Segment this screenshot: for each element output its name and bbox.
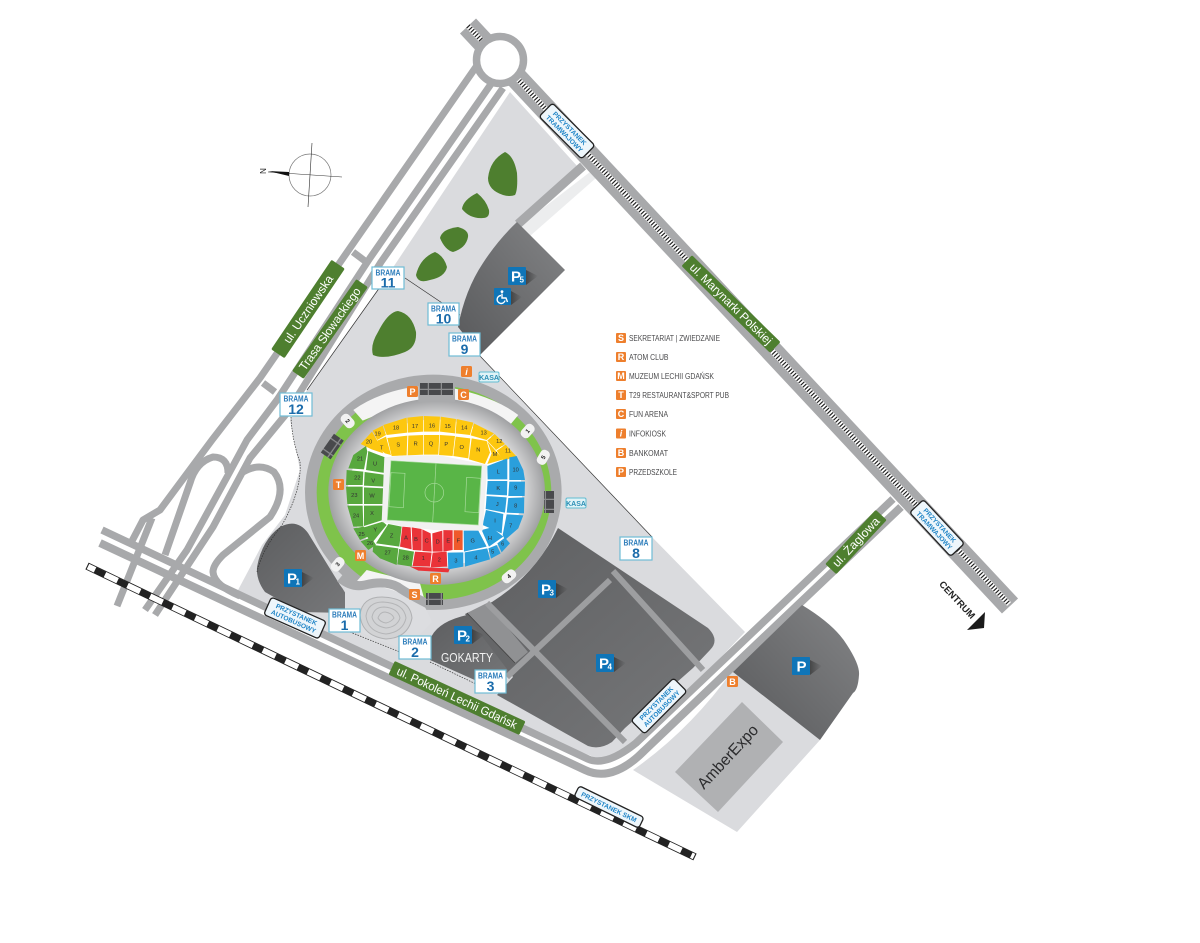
map marker S	[409, 589, 420, 600]
gate 1	[329, 609, 360, 633]
sector labels: S	[396, 443, 400, 449]
sector labels: V	[371, 479, 375, 485]
SKM stop	[574, 786, 644, 828]
legend item R	[616, 352, 668, 362]
map marker R	[430, 573, 441, 584]
SKM stop: PRZYSTANEK SKM	[580, 791, 638, 824]
sector labels: H	[488, 536, 492, 542]
gate 1: BRAMA	[332, 610, 357, 620]
parking sign P3: 3	[550, 588, 554, 598]
parking sign P4: P	[599, 656, 609, 672]
light grey expo area	[633, 670, 820, 832]
sector labels: D	[436, 540, 440, 546]
map marker T	[333, 479, 344, 490]
legend item M: M	[617, 371, 625, 381]
road label: ul. Pokolen Lechii Gdansk: ul. Pokoleń Lechii Gdańsk	[395, 664, 520, 732]
sector labels	[351, 423, 519, 564]
railway: SKM line	[87, 566, 695, 857]
sector labels: 4	[474, 555, 478, 561]
tram stop north: TRAMWAJOWY	[544, 114, 584, 154]
parking sign P: P	[796, 658, 807, 676]
gate 3	[475, 670, 506, 694]
road loops	[165, 457, 280, 596]
numbered ring gates	[329, 412, 551, 585]
road: Trasa Slowackiego	[145, 84, 503, 615]
sector labels: 3	[454, 558, 458, 564]
map marker S: S	[411, 590, 418, 600]
sector labels: B	[414, 537, 418, 543]
legend item C: FUN ARENA	[629, 410, 669, 419]
football pitch	[382, 455, 487, 531]
bus stop east: PRZYSTANEK	[639, 686, 675, 722]
sector labels: 2	[438, 558, 441, 564]
gate 11: BRAMA	[376, 268, 401, 278]
legend item P: PRZEDSZKOLE	[629, 468, 677, 477]
legend item i: i	[620, 429, 623, 439]
stadium outer ring	[305, 375, 562, 610]
sector labels: K	[496, 486, 500, 492]
sector labels: 26	[367, 541, 373, 547]
sector labels: R	[414, 441, 418, 447]
ticket office east	[566, 498, 586, 508]
gate 12: 12	[288, 401, 304, 417]
bus stop west: AUTOBUSOWY	[270, 609, 317, 635]
gate 10: 10	[436, 310, 451, 326]
sector labels: I	[494, 519, 496, 525]
sector labels: 21	[357, 457, 363, 463]
sector labels: 12	[496, 439, 502, 445]
sector labels: U	[373, 462, 377, 468]
sector labels: 5	[491, 549, 494, 555]
gate 8: BRAMA	[624, 538, 649, 548]
parking sign P1: 1	[296, 578, 300, 586]
ticket office east: KASA	[566, 501, 586, 508]
sector labels: G	[470, 538, 475, 544]
sector labels: O	[459, 445, 464, 451]
parking sign P1	[284, 569, 314, 588]
parking sign P4	[596, 654, 626, 672]
gate 11	[372, 267, 404, 290]
green seating sectors	[346, 446, 414, 567]
tram stop south	[910, 500, 964, 556]
gate 9	[449, 333, 480, 357]
tram stop south: PRZYSTANEK	[922, 507, 957, 545]
sector labels: 17	[412, 424, 418, 430]
sector labels: 27	[385, 550, 391, 556]
gate 8	[620, 537, 652, 561]
sector labels: 13	[480, 431, 487, 437]
AmberExpo building	[675, 702, 783, 812]
sector labels: 6	[501, 542, 504, 548]
legend item S: SEKRETARIAT | ZWIEDZANIE	[629, 334, 720, 343]
sector labels: L	[497, 469, 500, 475]
tram stop north	[539, 103, 595, 159]
grey ring under top stairs	[418, 380, 455, 402]
map marker M: M	[357, 551, 364, 561]
parking P1	[257, 524, 348, 613]
stairs	[321, 383, 554, 605]
map marker P	[407, 386, 418, 397]
parking sign P5	[508, 267, 538, 286]
yellow seating sectors	[361, 416, 517, 464]
gate 11: 11	[381, 274, 396, 290]
legend item T: T29 RESTAURANT&SPORT PUB	[629, 391, 729, 400]
gate 2	[399, 636, 431, 660]
legend item B: BANKOMAT	[629, 449, 668, 458]
legend item R: ATOM CLUB	[629, 353, 668, 362]
sector labels: 15	[445, 424, 451, 430]
parking sign P3	[538, 580, 568, 598]
parking sign P5: P	[511, 268, 521, 286]
sector labels: A	[404, 535, 408, 541]
legend item R: R	[618, 352, 625, 362]
sector labels: J	[496, 502, 499, 508]
legend item S: S	[618, 333, 624, 343]
bus stop east	[631, 678, 687, 734]
road: ul. Pokolen Lechii Gdansk and ul. Zaglowa	[100, 499, 901, 774]
sector labels: E	[446, 539, 450, 545]
parking sign P	[792, 657, 822, 676]
sector labels: N	[476, 448, 480, 454]
map marker C	[458, 389, 469, 400]
sector labels: 10	[512, 468, 519, 474]
legend item i	[616, 428, 667, 439]
roundabout	[476, 36, 524, 84]
road label: ul. Uczniowska: ul. Uczniowska	[280, 272, 336, 346]
legend	[616, 333, 729, 477]
map marker B: B	[729, 677, 736, 687]
road label: Trasa Slowackiego: Trasa Słowackiego	[296, 285, 364, 373]
stadium green concourse	[317, 385, 551, 600]
numbered ring gates: 5	[541, 454, 548, 461]
tram stop south: TRAMWAJOWY	[914, 511, 953, 552]
legend item P: P	[618, 467, 624, 477]
sector labels: 24	[353, 513, 359, 519]
bus stop east: AUTOBUSOWY	[643, 689, 682, 729]
gate 9: 9	[461, 341, 469, 357]
parking P5	[458, 222, 565, 355]
map marker R: R	[432, 574, 439, 584]
road label: ul. Marynarki Polskiej: ul. Marynarki Polskiej	[687, 260, 775, 348]
numbered ring gates: 4	[506, 573, 513, 580]
parking sign P2	[454, 626, 484, 644]
numbered ring gates: 2	[344, 418, 351, 425]
map marker C: C	[460, 390, 467, 400]
map marker T: T	[336, 480, 342, 490]
sector labels: 16	[429, 423, 435, 429]
bus stop west	[264, 597, 326, 639]
road label: ul. Zaglowa: ul. Żaglowa	[829, 514, 883, 570]
inner grey ring	[328, 398, 545, 585]
sector labels: Z	[390, 533, 394, 539]
parking sign P4: 4	[608, 662, 612, 672]
sector labels: 7	[509, 524, 512, 530]
gate 10: BRAMA	[431, 304, 456, 314]
seating bowl base	[348, 419, 522, 567]
compass: N	[258, 168, 267, 174]
ticket office north: KASA	[479, 375, 499, 382]
sector labels: 9	[514, 485, 517, 491]
gate 10	[428, 303, 459, 326]
gate 3: 3	[487, 678, 495, 694]
numbered ring gates: 3	[335, 561, 342, 568]
blue seating sectors	[448, 456, 525, 569]
AmberExpo building: AmberExpo	[695, 722, 762, 793]
sector labels: X	[370, 511, 374, 517]
sector labels: 23	[351, 493, 357, 499]
legend item C	[616, 409, 669, 419]
fence lines	[257, 278, 652, 684]
legend item B: B	[618, 448, 625, 458]
compass	[258, 143, 342, 207]
legend item M: MUZEUM LECHII GDAŃSK	[629, 372, 715, 381]
legend item S	[616, 333, 720, 343]
legend item M	[616, 371, 715, 381]
sector labels: 11	[505, 448, 511, 454]
sector labels: 19	[375, 432, 381, 438]
legend item i: INFOKIOSK	[629, 430, 667, 438]
legend item T: T	[618, 390, 624, 400]
light grey site area	[237, 92, 745, 762]
parking P2	[430, 615, 515, 690]
gate 2: BRAMA	[402, 638, 428, 646]
sector labels: F	[457, 538, 461, 544]
sector labels: M	[493, 452, 498, 458]
go-kart track	[340, 578, 432, 650]
road: ul. Marynarki Polskiej with tram track	[468, 26, 1010, 606]
sector labels: 25	[359, 532, 365, 538]
sector labels: 8	[514, 504, 517, 510]
sector labels: W	[369, 494, 375, 500]
service road	[518, 166, 596, 236]
centrum direction arrow: CENTRUM	[936, 579, 977, 622]
parking P3 and P4 block	[465, 528, 715, 747]
sector labels: T	[380, 445, 384, 451]
gate 12	[280, 393, 312, 417]
icon: accessible parking	[494, 288, 522, 305]
tram stop north: PRZYSTANEK	[551, 111, 587, 147]
parking P east	[733, 605, 859, 740]
map marker i: i	[465, 367, 468, 377]
parking sign P5: 5	[520, 276, 524, 284]
sector labels: Y	[373, 528, 377, 534]
parking sign P2: P	[457, 628, 467, 644]
sector labels: 1	[422, 556, 425, 562]
parking sign P1: P	[287, 570, 297, 588]
legend item T	[616, 390, 729, 400]
sector labels: C	[425, 538, 429, 544]
gate 9: BRAMA	[452, 334, 477, 344]
map marker B	[727, 676, 738, 687]
sector labels: Q	[429, 442, 434, 448]
sector labels: 20	[366, 439, 372, 445]
red seating sectors	[400, 527, 463, 572]
gate 1: 1	[341, 617, 349, 633]
GOKARTY label: GOKARTY	[441, 651, 494, 665]
sector labels: 18	[393, 426, 399, 432]
legend item B	[616, 448, 668, 458]
parking sign P2: 2	[466, 634, 470, 644]
road: ul. Uczniowska	[117, 64, 478, 606]
sector labels: P	[444, 442, 448, 448]
ticket office north	[479, 372, 499, 382]
map marker M	[355, 550, 366, 561]
legend item C: C	[618, 409, 625, 419]
map marker i	[461, 366, 472, 377]
numbered ring gates: 1	[525, 428, 532, 435]
white concourse segments	[353, 385, 518, 602]
parking sign P3: P	[541, 582, 551, 598]
gate 8: 8	[632, 545, 640, 561]
sector labels: 22	[354, 475, 360, 481]
trees	[372, 152, 517, 357]
legend item P	[616, 467, 677, 477]
centrum direction arrow	[936, 579, 985, 630]
bus stop west: PRZYSTANEK	[275, 603, 318, 628]
sector labels: 14	[461, 426, 467, 432]
stadium	[305, 375, 562, 610]
gate 3: BRAMA	[478, 672, 503, 680]
gate 2: 2	[411, 644, 419, 660]
sector labels: 28	[403, 555, 409, 561]
gate 12: BRAMA	[284, 394, 309, 404]
road label: ul. Uczniowska	[271, 260, 345, 358]
map marker P: P	[409, 387, 416, 397]
